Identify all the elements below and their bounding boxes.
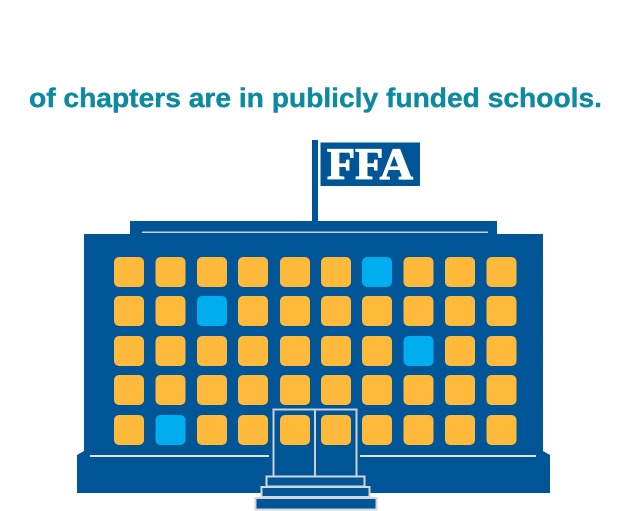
windows bbox=[114, 257, 516, 445]
icon: flag: FFA bbox=[327, 140, 413, 188]
icon: flag bbox=[312, 140, 420, 223]
school building bbox=[77, 221, 550, 510]
building body bbox=[77, 221, 550, 493]
door bbox=[274, 410, 356, 476]
heading: of chapters are in publicly funded schools. bbox=[29, 83, 602, 113]
steps bbox=[256, 476, 376, 510]
